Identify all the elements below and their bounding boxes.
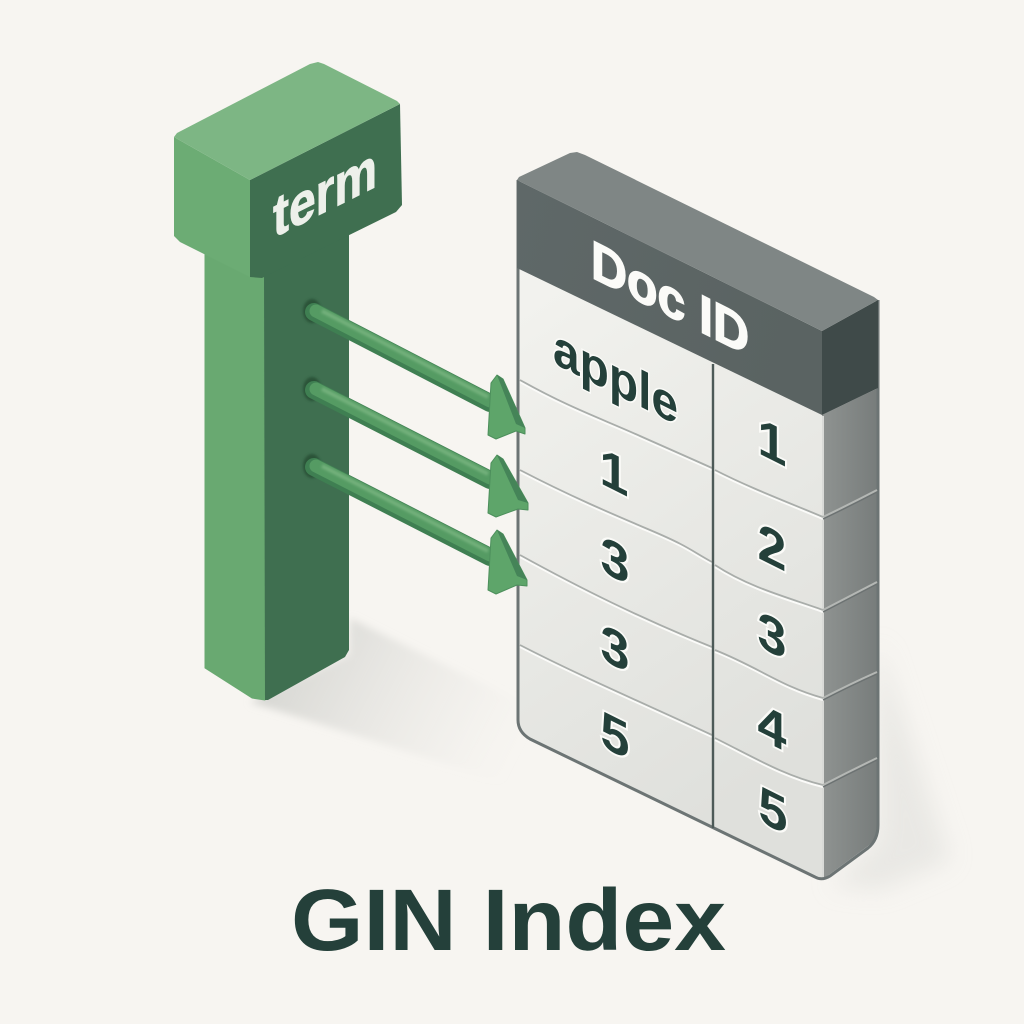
header right face	[822, 300, 878, 415]
right column values: 1	[758, 406, 786, 479]
shaft	[314, 467, 490, 557]
shadow: table	[830, 640, 950, 890]
table outline	[518, 180, 878, 879]
left column values: 3	[601, 524, 629, 597]
right column values	[758, 406, 787, 847]
hole	[303, 299, 321, 323]
apple label: apple	[553, 316, 678, 437]
shaft	[314, 390, 490, 480]
column divider	[712, 364, 714, 828]
hole	[303, 454, 321, 478]
left column values	[600, 436, 629, 772]
arrow 3	[303, 454, 527, 594]
header top face	[517, 152, 878, 331]
head	[488, 375, 525, 439]
cap top face	[174, 62, 400, 180]
arrow 2	[303, 377, 528, 517]
pillar: term column	[174, 62, 402, 700]
arrow 1	[303, 299, 525, 439]
right column values: 3	[758, 599, 786, 672]
term label: term	[273, 134, 377, 251]
head	[488, 455, 528, 517]
left column values: 3	[601, 612, 629, 685]
table front corner highlight	[822, 416, 824, 880]
head	[488, 530, 527, 594]
title: GIN Index	[291, 872, 726, 969]
right column values: 5	[759, 774, 787, 847]
cap right face	[250, 104, 402, 278]
table body front	[518, 268, 822, 880]
header front face	[517, 180, 822, 415]
pillar left face	[205, 240, 265, 700]
pillar right face	[264, 220, 349, 700]
hole	[303, 377, 321, 401]
shadow: pillar	[250, 618, 560, 800]
right column values: 4	[758, 691, 787, 764]
Doc ID label: Doc ID	[591, 229, 749, 368]
table: Doc ID	[517, 152, 878, 880]
row dividers	[520, 380, 877, 787]
shaft	[314, 312, 490, 403]
left column values: 5	[601, 699, 629, 772]
right column values: 2	[758, 511, 786, 584]
left column values: 1	[600, 436, 628, 509]
cap left face	[174, 137, 250, 277]
table body side	[822, 388, 878, 880]
